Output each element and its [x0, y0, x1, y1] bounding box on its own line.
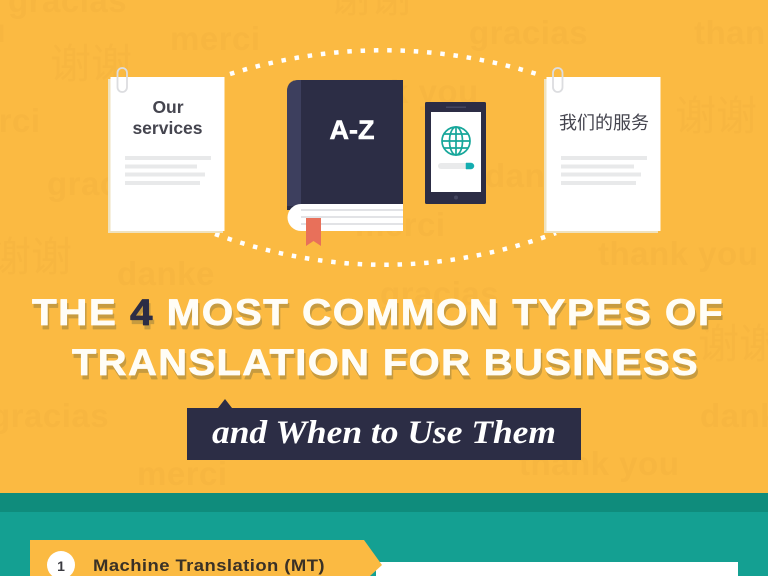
title text: TRANSLATION FOR BUSINESS: [72, 342, 699, 383]
globe icon: [442, 127, 470, 155]
title text: THE 4 MOST COMMON TYPES OF: [32, 292, 724, 333]
document heading: Our: [152, 97, 184, 117]
watermark words: merci: [170, 20, 261, 57]
source document: Our services: services: [132, 118, 203, 138]
title: [32, 292, 726, 387]
translated document: [544, 68, 660, 233]
subtitle banner: and When to Use Them: [212, 415, 556, 451]
watermark words: thank you: [598, 235, 758, 272]
watermark words: danke: [485, 157, 583, 194]
watermark words: 谢谢: [675, 93, 757, 139]
teal section: [0, 493, 768, 576]
watermark words: thank you: [519, 445, 679, 482]
source document: Our services: [108, 68, 224, 233]
title shadow: TRANSLATION FOR BUSINESS: [74, 346, 700, 387]
smartphone icon: [425, 102, 486, 204]
watermark words: gracias: [47, 165, 166, 202]
content panel: [376, 562, 738, 576]
title text: [32, 292, 724, 383]
watermark words: merci: [355, 206, 446, 243]
paperclip: [553, 68, 562, 92]
number badge: [47, 551, 75, 576]
watermark words: merci: [137, 455, 228, 492]
section label tag: 1: [57, 558, 65, 574]
section heading: Machine Translation (MT): [93, 556, 325, 575]
search bar: [438, 163, 468, 169]
title shadow: [34, 296, 726, 387]
section label tag: [30, 540, 382, 576]
watermark words: gracias: [380, 275, 499, 312]
watermark words: gracias: [469, 14, 588, 51]
document heading: 我们的服务: [559, 113, 649, 133]
watermark words: 谢谢: [50, 41, 132, 87]
book title: A-Z: [330, 115, 374, 145]
watermark words: k you: [390, 73, 479, 110]
dotted arc connecting the documents: [215, 50, 556, 265]
watermark words: danke: [117, 255, 215, 292]
dictionary book icon: [287, 80, 403, 246]
subtitle banner: [187, 399, 581, 460]
document text lines: [125, 156, 211, 185]
title shadow: THE 4 MOST COMMON TYPES OF: [34, 296, 726, 337]
paperclip: [118, 68, 127, 92]
document text lines: [561, 156, 647, 185]
